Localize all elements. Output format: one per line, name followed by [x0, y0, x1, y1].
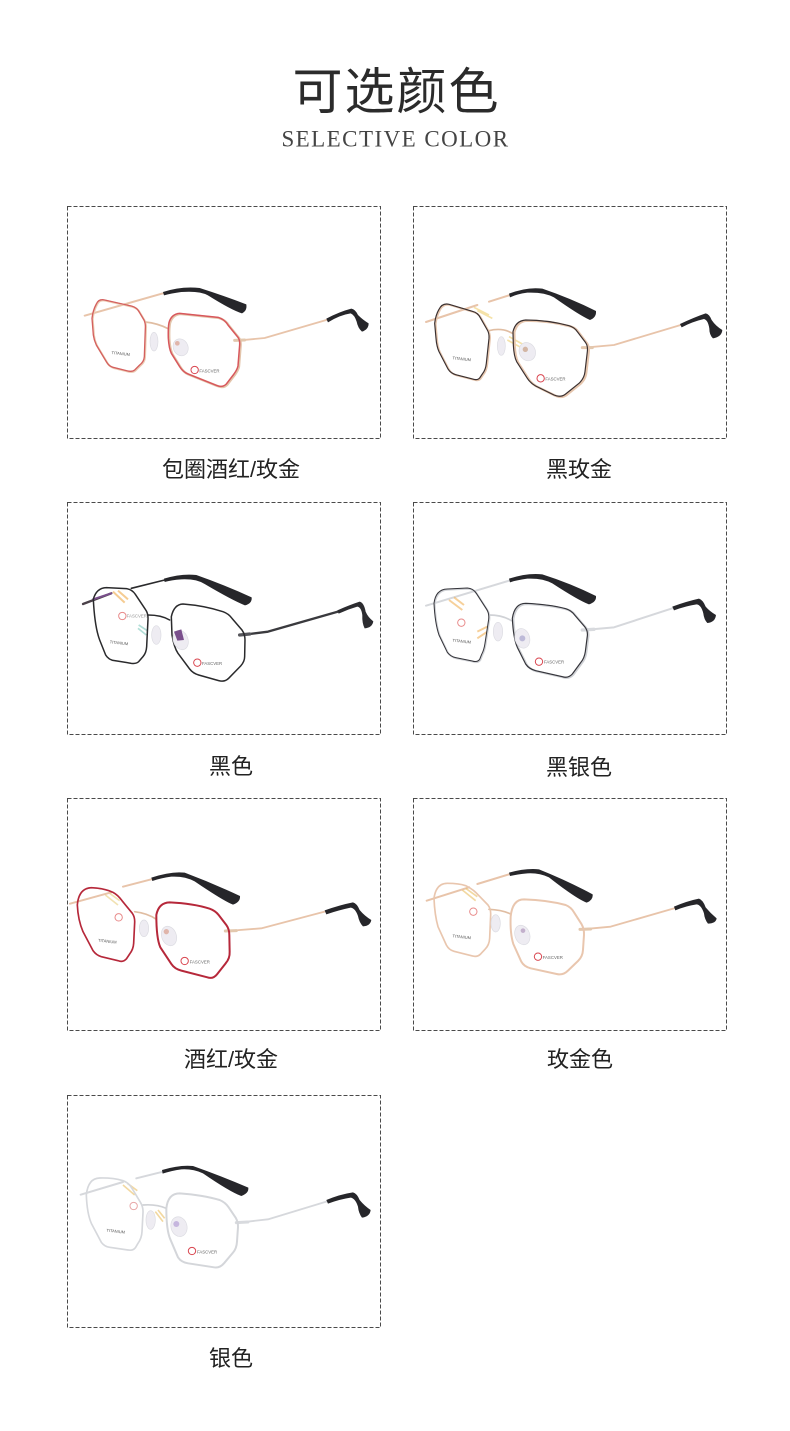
- lens sticker: [474, 307, 522, 347]
- lens logo: FASCVER: [197, 1249, 217, 1254]
- nose pads: [493, 622, 532, 650]
- caption: 黑银色: [546, 755, 612, 780]
- bridge: [148, 615, 170, 620]
- near temple: [240, 602, 373, 635]
- lens logo: [106, 1202, 217, 1255]
- bridge: [489, 329, 512, 333]
- title: [281, 52, 510, 152]
- glasses: wine red / rose gold: [70, 872, 371, 978]
- title: 可选颜色: [292, 52, 500, 124]
- far temple: [85, 287, 246, 316]
- lens logo: FASCVER: [199, 368, 220, 373]
- lens logo: TITANIUM: [110, 639, 129, 646]
- lens logo: FASCVER: [544, 659, 564, 664]
- bridge: [489, 909, 511, 914]
- caption: 包圈酒红/玫金: [162, 457, 300, 482]
- panel: rose gold: [414, 798, 726, 1072]
- lens logo: TITANIUM: [98, 938, 117, 945]
- far temple: [426, 288, 596, 322]
- lens logo: TITANIUM: [452, 355, 471, 362]
- bridge: [135, 912, 156, 919]
- lens logo: FASCVER: [543, 955, 563, 960]
- caption: 黑玫金: [546, 457, 612, 482]
- lens logo: FASCVER: [202, 661, 222, 666]
- bridge: [489, 615, 511, 621]
- lens logo: TITANIUM: [106, 1228, 125, 1235]
- lens logo: TITANIUM: [452, 638, 471, 645]
- near temple: [225, 902, 371, 931]
- far temple: [83, 575, 252, 605]
- lens logo: [110, 612, 222, 666]
- nose pads: [152, 626, 191, 652]
- lens logo: [452, 619, 564, 665]
- bridge: [145, 322, 168, 329]
- nose pads: [491, 915, 533, 947]
- right lens: [166, 1193, 238, 1267]
- lens sticker: [123, 1183, 165, 1222]
- left lens: [434, 588, 489, 662]
- near temple: [582, 599, 716, 630]
- panel: black rose gold: [414, 206, 726, 482]
- nose pads: [139, 920, 179, 948]
- left lens: [86, 1178, 143, 1250]
- left lens: [435, 304, 490, 380]
- right lens: [511, 899, 584, 974]
- right lens: [168, 313, 241, 387]
- left lens: [77, 888, 135, 961]
- glasses: black silver: [426, 574, 716, 678]
- title: SELECTIVE COLOR: [281, 126, 510, 152]
- caption: 玫金色: [547, 1047, 613, 1072]
- left lens: [93, 588, 148, 663]
- nose pads: [497, 337, 539, 363]
- caption: 银色: [209, 1346, 253, 1371]
- glasses: rose gold: [427, 869, 717, 974]
- caption: 酒红/玫金: [184, 1047, 278, 1072]
- glasses: silver: [81, 1166, 371, 1267]
- panel: black silver: [414, 502, 726, 780]
- lens logo: [452, 355, 566, 382]
- glasses: black: [83, 575, 373, 681]
- right lens: [156, 902, 230, 978]
- left lens: [434, 883, 491, 956]
- near temple: [580, 899, 717, 929]
- panel: silver: [68, 1096, 380, 1371]
- lens logo: [111, 350, 220, 374]
- lens logo: [452, 908, 563, 960]
- lens sticker: [105, 893, 120, 905]
- near temple: [236, 1192, 371, 1223]
- right lens: [512, 603, 588, 678]
- glasses: wrapped wine red / rose gold: [85, 287, 369, 387]
- lens logo: FASCVER: [545, 377, 566, 382]
- glasses: black rose gold: [426, 288, 722, 397]
- right lens: [171, 604, 245, 681]
- panel: wine red / rose gold: [68, 798, 380, 1072]
- panel: wrapped wine red / rose gold: [68, 206, 380, 482]
- lens logo: [98, 914, 210, 965]
- lens logo: FASCVER: [190, 959, 210, 964]
- lens logo: TITANIUM: [452, 933, 471, 940]
- far temple: [70, 872, 240, 905]
- lens sticker: [449, 597, 487, 638]
- lens sticker: [462, 888, 477, 901]
- nose pads: [150, 332, 191, 358]
- lens sticker: [113, 591, 128, 603]
- right lens: [513, 320, 589, 397]
- nose pads: [146, 1211, 189, 1238]
- panel: black: [68, 502, 380, 779]
- caption: 黑色: [209, 754, 253, 779]
- near temple: [582, 313, 722, 348]
- far temple: [81, 1166, 248, 1196]
- bridge: [143, 1205, 166, 1208]
- far temple: [426, 574, 596, 606]
- lens logo: FASCVER: [127, 613, 147, 618]
- near temple: [235, 309, 369, 341]
- left lens: [92, 300, 146, 372]
- far temple: [427, 869, 593, 903]
- lens logo: TITANIUM: [111, 350, 130, 357]
